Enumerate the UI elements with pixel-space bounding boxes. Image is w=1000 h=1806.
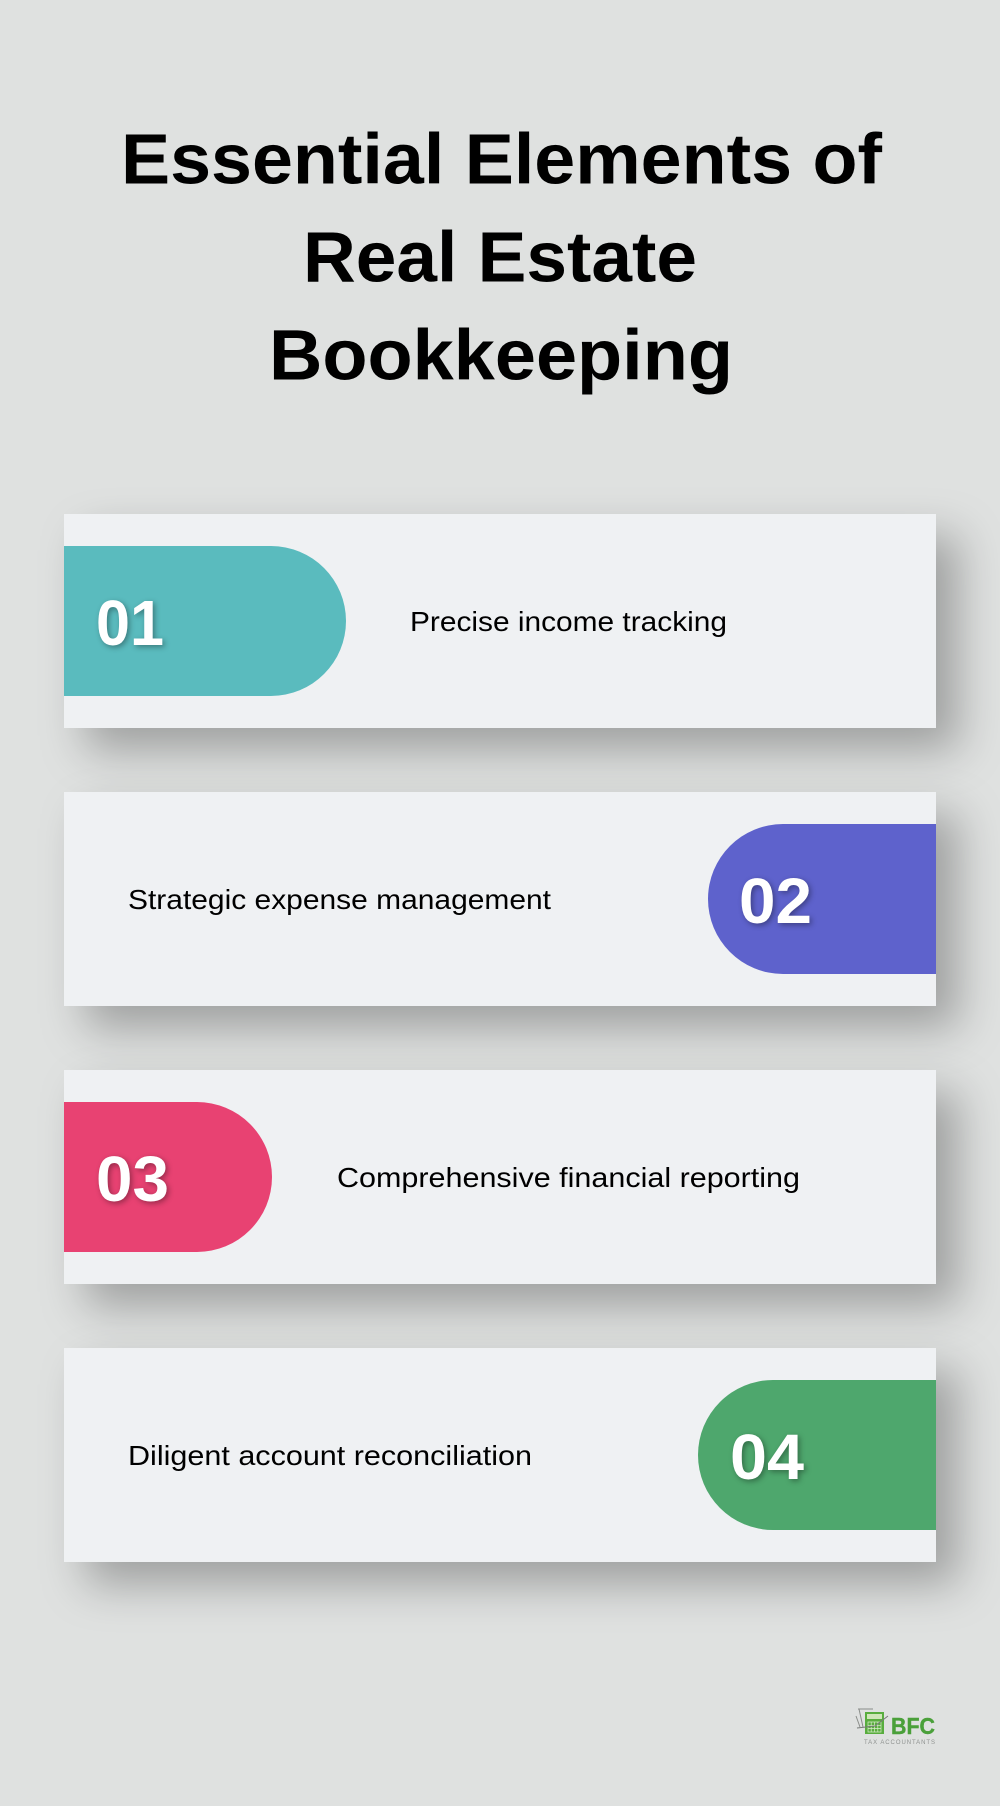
- title: Bookkeeping: [269, 316, 733, 396]
- number 04: 04: [730, 1421, 804, 1493]
- text: precise income tracking: Precise income tracking: [410, 606, 727, 637]
- panel: 02 strategic expense management: [64, 792, 936, 1006]
- number 02: 02: [739, 865, 812, 937]
- text: comprehensive financial reporting: Comprehensive financial reporting: [337, 1162, 800, 1193]
- title: [121, 120, 882, 396]
- panel: 01 precise income tracking: [64, 514, 936, 728]
- text: strategic expense management: Strategic expense management: [128, 884, 551, 915]
- number pill 02: [708, 824, 936, 974]
- number pill 03: [64, 1102, 272, 1252]
- text: diligent account reconciliation: Diligent account reconciliation: [128, 1440, 532, 1471]
- number 03: 03: [96, 1143, 169, 1215]
- logo: BFC tax accountants: [856, 1709, 935, 1746]
- number 01: 01: [96, 587, 164, 659]
- title: Real Estate: [303, 218, 697, 298]
- logo: BFC tax accountants: BFC: [891, 1713, 935, 1739]
- panel: 04 diligent account reconciliation: [64, 1348, 936, 1562]
- title: Essential Elements of: [121, 120, 882, 200]
- logo: BFC tax accountants: TAX ACCOUNTANTS: [864, 1740, 935, 1746]
- panel: 03 comprehensive financial reporting: [64, 1070, 936, 1284]
- number pill 04: [698, 1380, 936, 1530]
- number pill 01: [64, 546, 346, 696]
